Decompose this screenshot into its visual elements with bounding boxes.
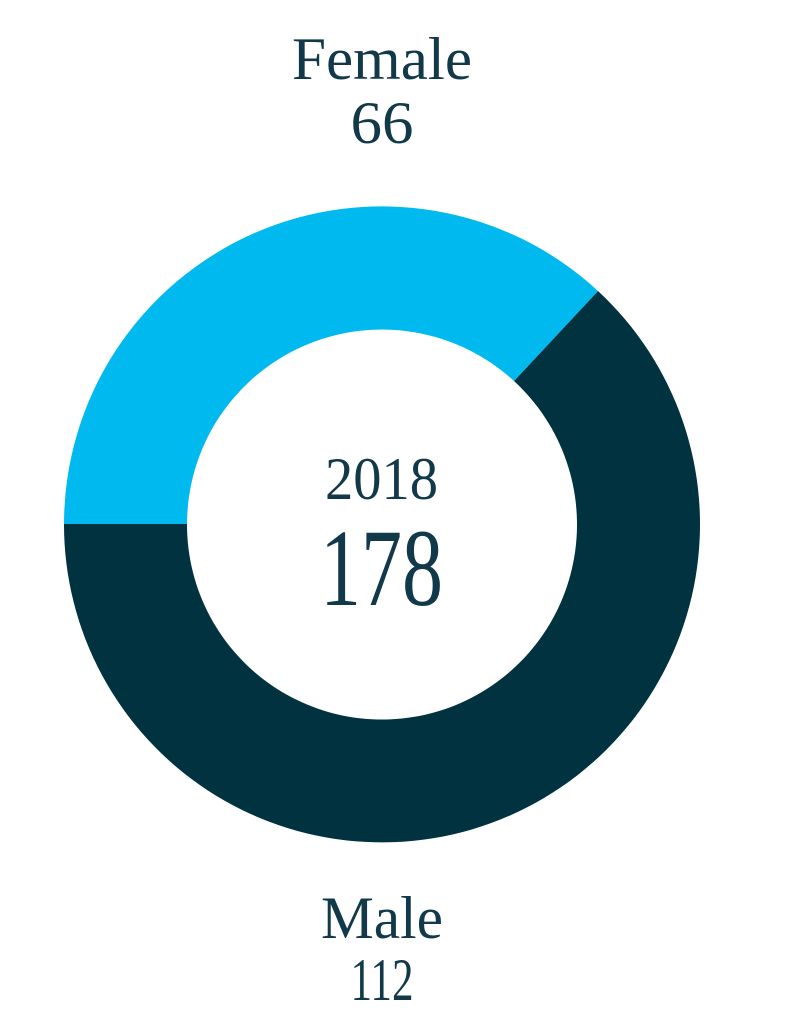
label: female: Female bbox=[292, 26, 472, 92]
label: female: 66 bbox=[350, 90, 414, 156]
center total: 2018 bbox=[325, 446, 438, 512]
label: male bbox=[321, 885, 443, 1013]
donut chart bbox=[64, 206, 700, 842]
label: female bbox=[292, 26, 472, 156]
label: male: 112 bbox=[350, 947, 414, 1013]
segment: female bbox=[64, 206, 598, 524]
label: male: Male bbox=[321, 885, 443, 951]
center total bbox=[320, 446, 443, 629]
center total: 178 bbox=[320, 507, 443, 629]
segment: male bbox=[64, 291, 700, 842]
